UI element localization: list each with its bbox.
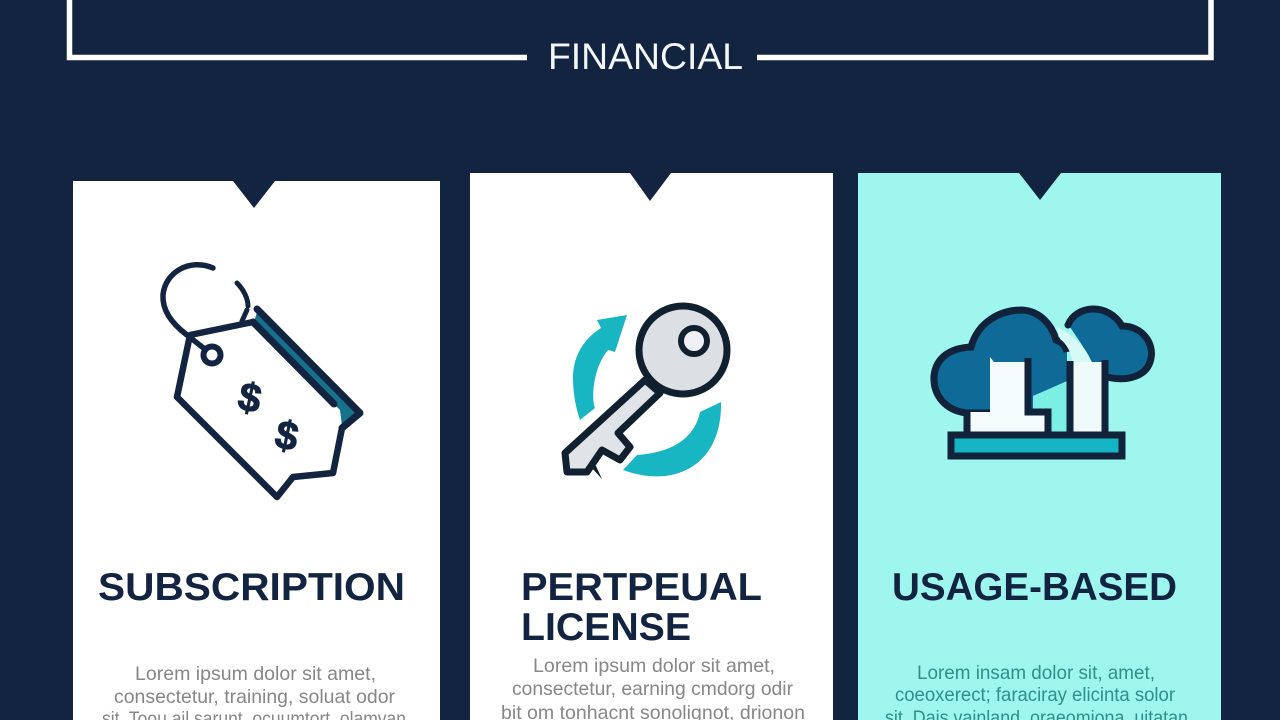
panel: subscription — [73, 181, 440, 720]
body text: consectetur, training, soluat odor — [114, 686, 395, 708]
icon: price tag — [163, 265, 360, 497]
header frame with category label — [70, 0, 1211, 77]
light sweep — [1057, 327, 1092, 364]
left cloud — [934, 310, 1067, 413]
heading: USAGE-BASED — [892, 566, 1177, 609]
body text — [501, 655, 805, 720]
panel: perpetual license: LICENSE — [521, 606, 691, 649]
buildings — [970, 357, 1047, 432]
heading: PERTPEUAL — [521, 566, 762, 609]
base bar — [951, 435, 1122, 456]
body text: coeoxerect; faraciray elicinta solor — [895, 684, 1175, 706]
body text: Lorem ipsum dolor sit amet, — [135, 663, 376, 685]
heading: SUBSCRIPTION — [98, 566, 405, 609]
panel: perpetual license — [470, 173, 833, 720]
card background — [470, 173, 833, 720]
heading: financial: FINANCIAL — [548, 36, 743, 77]
dollar signs: $ — [234, 374, 265, 422]
body text: Lorem ipsum dolor sit amet, — [533, 655, 775, 677]
renewal arrows — [573, 315, 627, 420]
body text: Lorem insam dolor sit, amet, — [917, 662, 1155, 684]
body text — [102, 663, 406, 720]
icon: key with renewal arrows — [565, 306, 727, 479]
panel: usage-based — [858, 173, 1221, 720]
key — [565, 380, 660, 472]
icon: clouds and buildings — [934, 309, 1151, 456]
card background — [73, 181, 440, 720]
dollar signs: $ — [271, 412, 302, 460]
card background — [858, 173, 1221, 720]
right cloud — [1068, 309, 1151, 379]
body text: consectetur, earning cmdorg odir — [512, 678, 793, 700]
body text — [885, 662, 1188, 720]
dollar signs — [234, 374, 302, 460]
